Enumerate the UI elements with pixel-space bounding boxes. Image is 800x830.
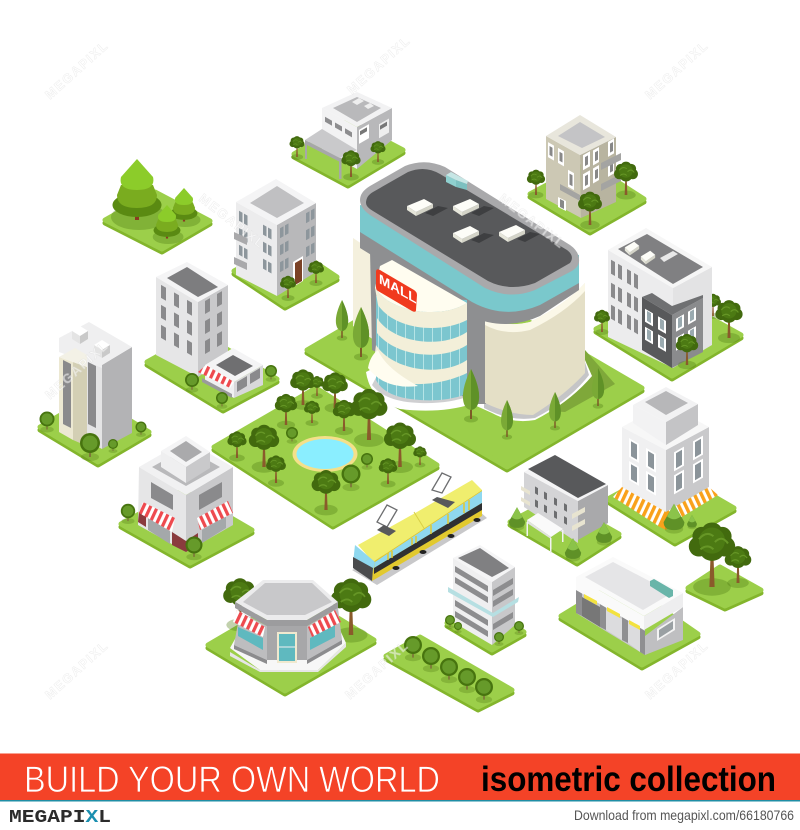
rooftop units — [72, 326, 110, 358]
cypress trees in front of mall — [353, 307, 561, 440]
watermarks: MEGAPIXL — [42, 638, 111, 702]
maroon storefront base — [138, 512, 226, 552]
balconies — [521, 486, 585, 531]
shop door — [277, 632, 297, 663]
footer logo: MEGAPI XL — [9, 808, 111, 828]
banner title: BUILD YOUR OWN WORLD — [24, 759, 440, 800]
mall round front — [368, 260, 467, 400]
cypress trees behind mall — [336, 300, 604, 409]
pond — [292, 436, 358, 472]
park tile with pond — [214, 369, 437, 527]
right apartment tile with dark block — [594, 228, 743, 379]
mall gray and glass bands — [360, 205, 579, 324]
orange awning building tile — [608, 387, 734, 544]
mall pavement — [366, 345, 592, 421]
red striped awnings — [139, 501, 233, 532]
mall sign: MALL — [379, 272, 417, 308]
watermarks: MEGAPIXL — [642, 38, 711, 102]
watermarks: MEGAPIXL — [344, 33, 413, 97]
watermarks: MEGAPIXL — [42, 338, 111, 402]
octagonal shop tile — [208, 578, 374, 694]
white apartment tile — [234, 179, 337, 308]
watermarks — [42, 33, 711, 702]
shop striped awnings — [233, 610, 341, 637]
watermarks: MEGAPIXL — [342, 638, 411, 702]
awning shop tile — [121, 436, 252, 566]
banner subtitle: isometric collection — [481, 760, 776, 799]
gray apartment tile — [509, 455, 619, 564]
pine tree cluster tile — [105, 159, 210, 252]
banner — [0, 753, 800, 802]
leftmost tower tile — [40, 322, 149, 465]
top house tile — [289, 92, 403, 186]
mall roof — [360, 162, 579, 295]
watermarks: MEGAPIXL — [42, 38, 111, 102]
mall walls — [353, 238, 585, 415]
pantographs — [377, 473, 451, 527]
white canopy — [526, 513, 564, 553]
mall tile — [307, 162, 642, 470]
tram — [352, 473, 487, 585]
freestanding trees tile — [688, 522, 761, 609]
rooftop AC units — [446, 172, 468, 190]
watermarks: MEGAPIXL — [196, 191, 268, 252]
hedge tile — [386, 636, 512, 710]
watermarks: MEGAPIXL — [642, 638, 711, 702]
office block tile — [445, 545, 524, 653]
watermarks: MEGAPIXL — [496, 191, 568, 252]
orange awnings — [613, 487, 718, 530]
tower with annex shop tile — [147, 262, 277, 411]
shop windows — [238, 625, 335, 650]
garage shop tile — [561, 557, 698, 668]
beige apartment tile — [527, 115, 644, 233]
mall shadow on lawn — [530, 350, 615, 412]
